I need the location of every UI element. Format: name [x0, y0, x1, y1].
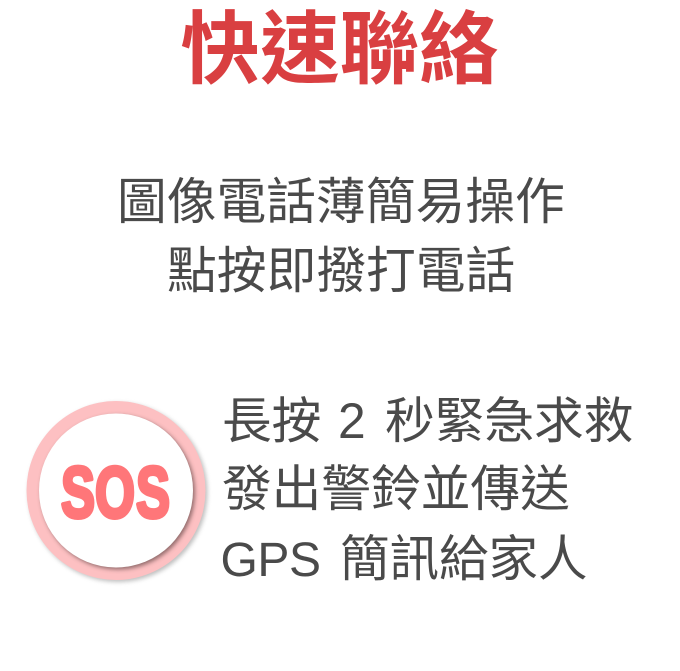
icon: SOS button: O	[95, 454, 135, 534]
text block: phonebook description: 圖像電話薄簡易操作	[117, 174, 565, 230]
text block: SOS description: 2	[338, 393, 366, 449]
text block: SOS description: GPS	[220, 534, 321, 587]
text block: phonebook description: 點按即撥打電話	[167, 243, 515, 299]
icon: SOS button: S	[61, 454, 95, 534]
icon: SOS button: S	[136, 454, 170, 534]
text block: SOS description	[220, 393, 633, 587]
text block: SOS description: 發出警鈴並傳送	[222, 461, 570, 517]
text block: SOS description: 長按	[222, 393, 321, 449]
text block: SOS description: 簡訊給家人	[340, 532, 588, 587]
icon: SOS button	[26, 400, 210, 584]
text block: phonebook description	[117, 174, 565, 299]
title: 快速聯絡	[180, 5, 498, 94]
text block: SOS description: 秒緊急求救	[385, 393, 633, 449]
